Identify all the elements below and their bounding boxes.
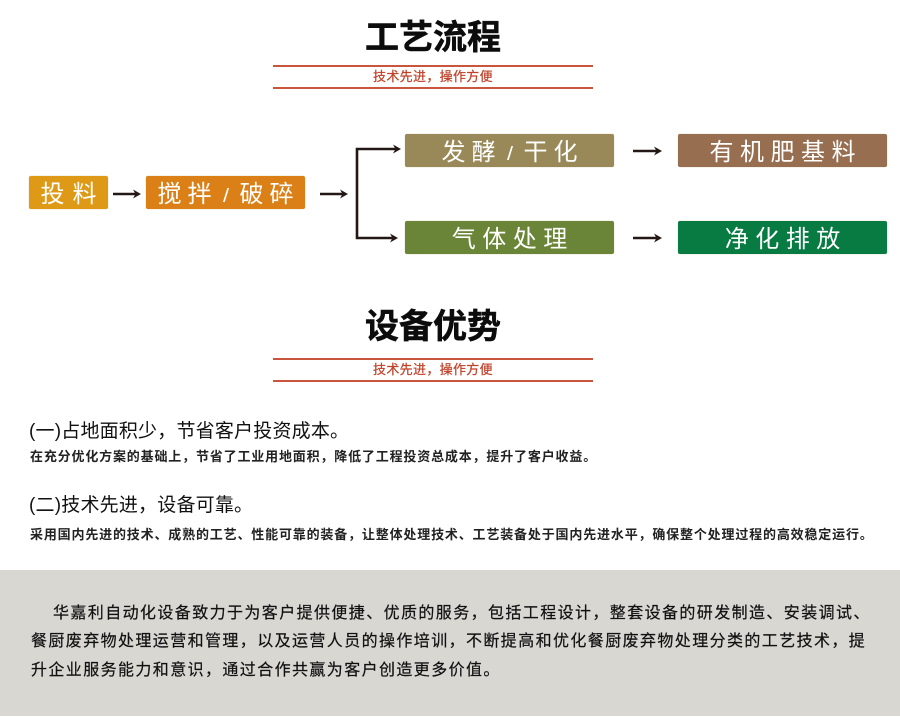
advantage two text: 采用国内先进的技术、成熟的工艺、性能可靠的装备，让整体处理技术、工艺装备处于国内先进水平，确保整个处理过程的高效稳定运行。 [30, 527, 874, 542]
box: mixing and crushing: 搅拌 破碎 [158, 181, 300, 208]
arrow: branch bracket [356, 144, 401, 242]
advantage one text: 在充分优化方案的基础上，节省了工业用地面积，降低了工程投资总成本，提升了客户收益。 [30, 449, 597, 464]
arrow: feed to mixing [113, 190, 141, 198]
title: equipment advantages: 设备优势 [365, 308, 501, 346]
arrow: drying to fertilizer [633, 146, 662, 156]
subtitle text: 技术先进，操作方便 [373, 362, 493, 377]
box: gas treatment: 气体处理 [452, 226, 574, 253]
arrow: gas to clean discharge [633, 234, 662, 242]
statement line 3: 升企业服务能力和意识，通过合作共赢为客户创造更多价值。 [31, 662, 501, 679]
box: fermentation and drying: / [506, 144, 513, 165]
subtitle band: process flow [273, 65, 593, 89]
box: mixing and crushing: / [222, 186, 229, 207]
subtitle text: 技术先进，操作方便 [373, 69, 493, 84]
box: organic fertilizer base [678, 134, 887, 167]
box: fermentation and drying [405, 134, 614, 167]
subtitle band: equipment advantages [273, 358, 593, 382]
box: clean discharge [678, 221, 887, 254]
box: organic fertilizer base: 有机肥基料 [710, 139, 862, 166]
box: feed in: 投料 [40, 181, 104, 208]
box: gas treatment [405, 221, 614, 254]
statement line 1: 华嘉利自动化设备致力于为客户提供便捷、优质的服务，包括工程设计，整套设备的研发制造、安装调试、 [53, 605, 871, 622]
panel: company statement [0, 570, 900, 716]
statement line 2: 餐厨废弃物处理运营和管理，以及运营人员的操作培训，不断提高和优化餐厨废弃物处理分类的工艺技术，提 [31, 633, 866, 650]
advantage one heading: (一)占地面积少，节省客户投资成本。 [29, 421, 349, 442]
box: fermentation and drying: 发酵 干化 [442, 139, 584, 166]
title: process flow: 工艺流程 [365, 19, 501, 57]
arrow: crushing to branch [320, 190, 348, 198]
advantage two heading: (二)技术先进，设备可靠。 [29, 495, 253, 516]
box: feed in [29, 176, 108, 209]
box: clean discharge: 净化排放 [725, 226, 847, 253]
